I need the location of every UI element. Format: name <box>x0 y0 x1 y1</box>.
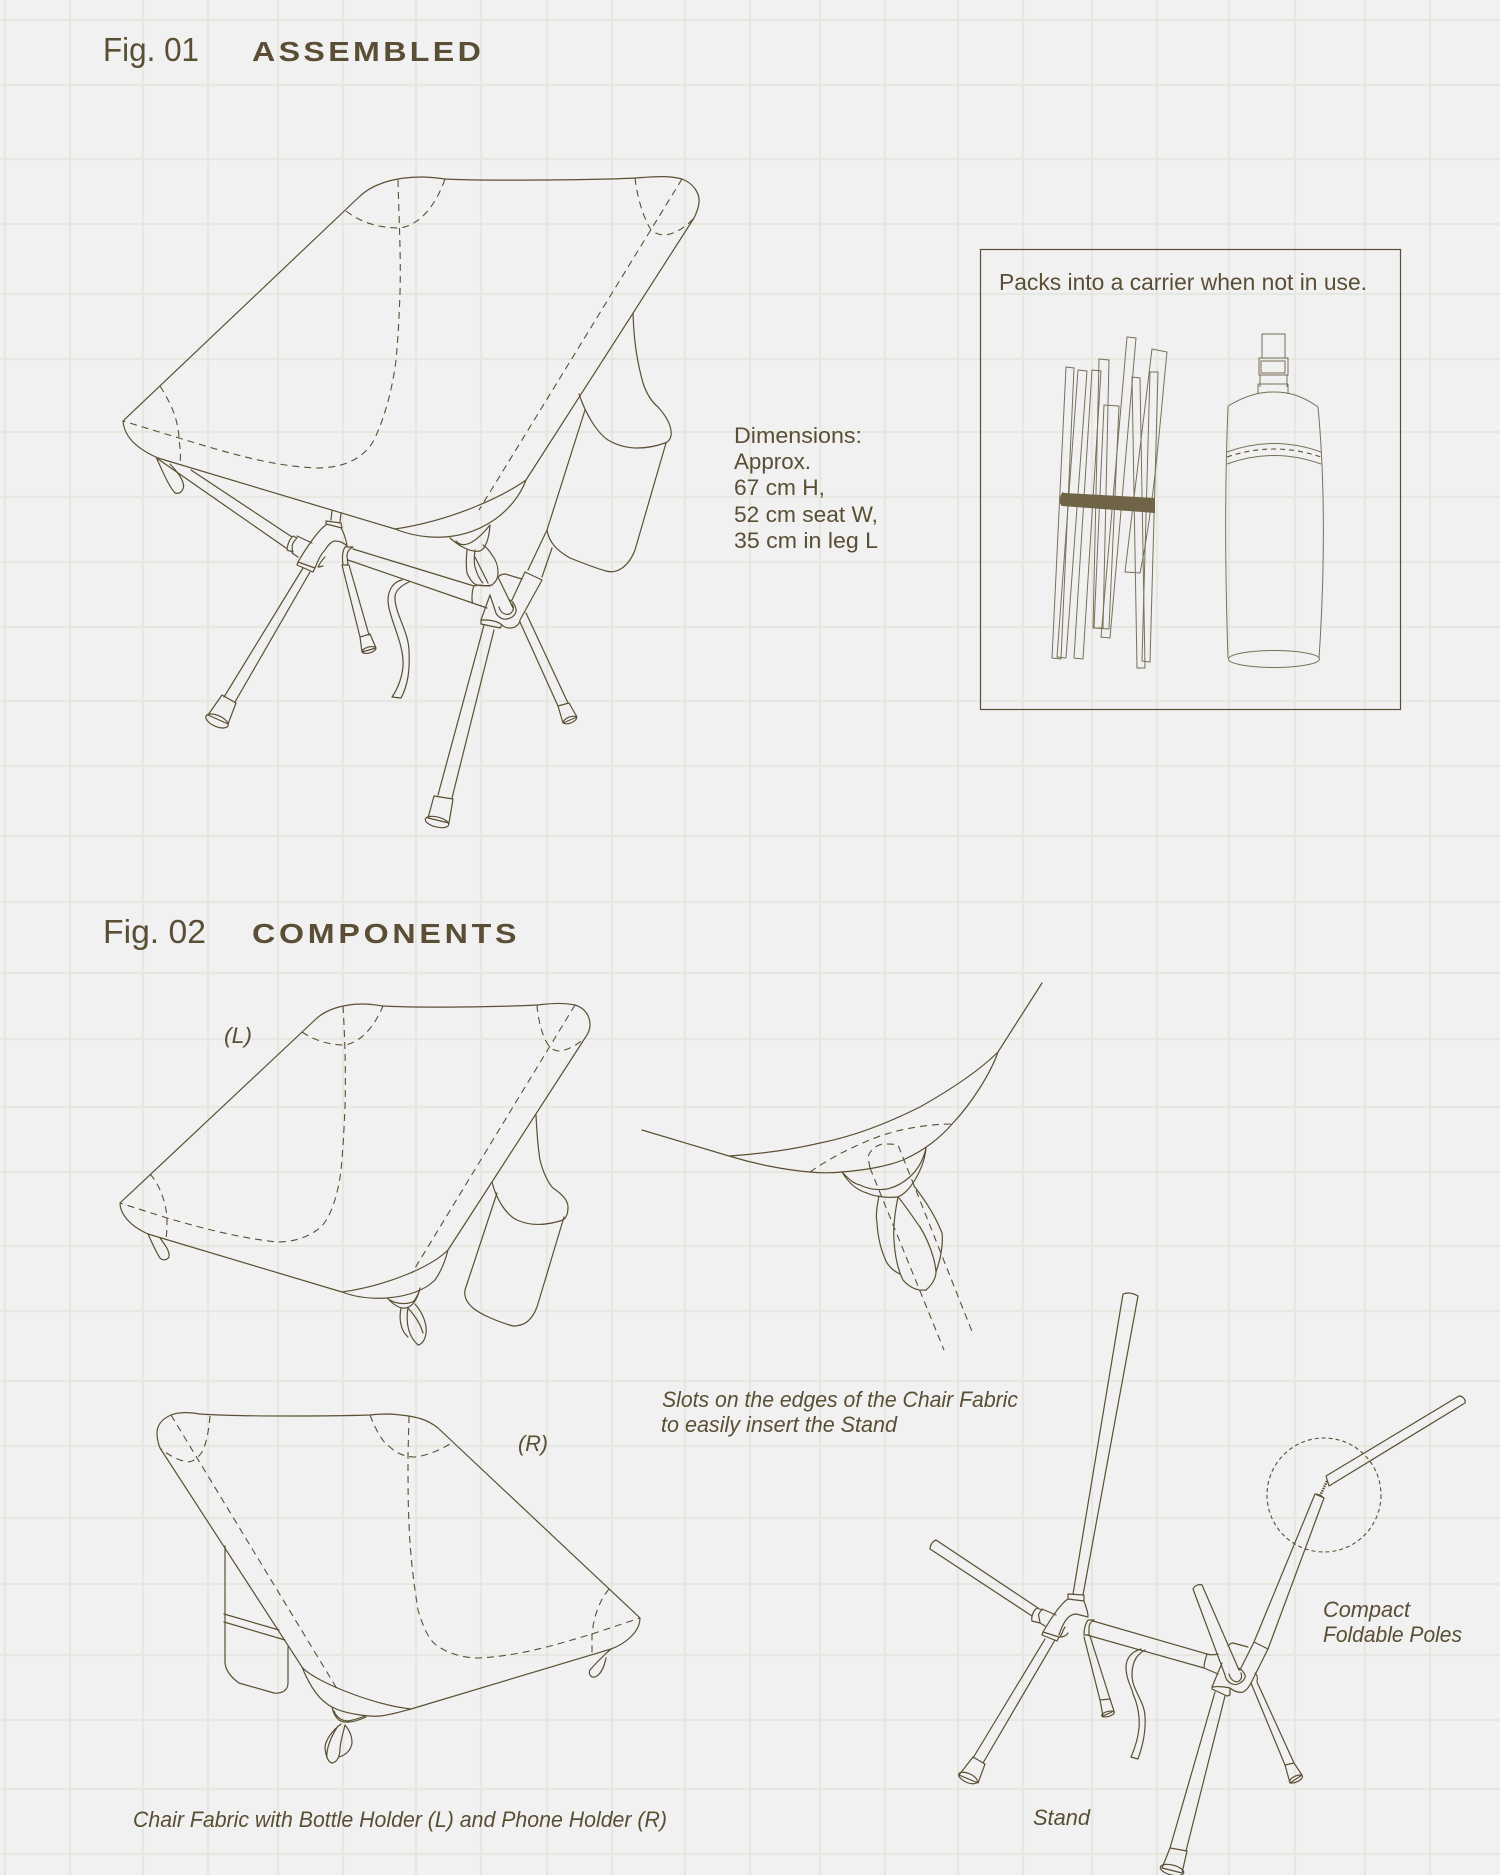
right front leg and foot <box>428 625 494 823</box>
dimensions text: 35 cm in leg L <box>734 528 878 553</box>
corner slot and loop <box>325 1707 366 1763</box>
section title: components: COMPONENTS <box>252 919 516 949</box>
caption: slots: Slots on the edges of the Chair Fabric <box>662 1387 1018 1412</box>
hidden sleeves <box>810 1124 973 1350</box>
icon: folded poles bundle <box>1052 337 1167 668</box>
section title: assembled: ASSEMBLED <box>252 37 481 67</box>
left hub <box>1042 1594 1094 1641</box>
hidden sleeves <box>160 1415 640 1692</box>
slot straps <box>842 1148 926 1197</box>
stand frame <box>158 459 578 830</box>
left front leg and foot <box>208 568 310 724</box>
foldable upright pole <box>1254 1494 1324 1649</box>
caption: chair fabric: Chair Fabric with Bottle Holder (L) and Phone Holder (R) <box>133 1807 667 1832</box>
right back leg and foot <box>1251 1682 1302 1783</box>
dimensions text: Approx. <box>734 449 811 474</box>
panel caption: Packs into a carrier when not in use. <box>999 269 1367 295</box>
fabric edge curves <box>642 983 1042 1173</box>
horizontal connecting tube <box>348 549 490 608</box>
right back leg and foot <box>520 613 577 723</box>
panel: packed carrier <box>980 250 1400 710</box>
left back leg and foot <box>342 565 376 652</box>
figure number 01: Fig. 01 <box>103 31 199 68</box>
chair fabric outline <box>123 177 699 537</box>
corner strap loop <box>156 457 184 493</box>
heading: Fig. 01 Assembled <box>103 31 481 68</box>
dimensions text: 52 cm seat W, <box>734 502 878 527</box>
folded upper pole <box>1326 1396 1465 1486</box>
dimensions text: Dimensions: <box>734 423 862 448</box>
dangling strap <box>1126 1649 1145 1759</box>
right front leg and foot <box>1162 1692 1225 1873</box>
short pole and ring <box>490 577 516 619</box>
caption: compact foldable poles: Foldable Poles <box>1323 1622 1462 1647</box>
illustration: assembled chair <box>123 177 699 830</box>
small corner loop <box>148 1234 169 1260</box>
caption: slots: to easily insert the Stand <box>661 1412 898 1437</box>
long rear pole <box>1073 1293 1138 1595</box>
dashed detail circle <box>1267 1438 1381 1552</box>
fabric outline <box>157 1413 640 1716</box>
hidden pole sleeves (dashed) <box>123 178 694 510</box>
right hub joint <box>481 572 542 628</box>
illustration: fabric right side <box>157 1413 640 1763</box>
corner slot and loop <box>387 1288 426 1345</box>
caption: compact foldable poles: Compact <box>1323 1597 1411 1622</box>
dimensions text <box>734 423 878 553</box>
left back leg and foot <box>1084 1636 1114 1716</box>
left arm pole <box>930 1540 1056 1626</box>
caption: stand: Stand <box>1033 1805 1091 1830</box>
elastic band <box>1060 492 1155 513</box>
connecting tube <box>1087 1621 1218 1674</box>
loop <box>876 1186 942 1290</box>
phone holder <box>224 1546 288 1693</box>
left front leg and foot <box>959 1639 1055 1783</box>
left hub joint <box>297 510 353 572</box>
elastic cord <box>1320 1481 1327 1496</box>
rear upright pole <box>528 410 585 577</box>
icon: carrier bag <box>1226 334 1323 668</box>
figure number 02: Fig. 02 <box>103 913 206 950</box>
hidden sleeves <box>120 1005 585 1273</box>
fabric outline <box>120 1003 590 1298</box>
illustration: stand <box>930 1293 1465 1875</box>
dimensions text: 67 cm H, <box>734 475 825 500</box>
bottle holder <box>465 1115 568 1326</box>
dangling strap <box>388 580 409 698</box>
panel border <box>980 250 1400 710</box>
bottle holder pocket <box>547 313 671 572</box>
short pole with ring <box>1193 1585 1245 1685</box>
caption: compact foldable poles <box>1323 1597 1462 1647</box>
slot and loop at seat corner <box>450 525 498 586</box>
label R: (R) <box>518 1431 548 1456</box>
illustration: fabric left side <box>120 1003 590 1345</box>
illustration: slot detail <box>642 983 1042 1350</box>
caption: slots <box>661 1387 1018 1437</box>
small corner loop <box>589 1649 611 1677</box>
left rear pole <box>158 459 312 557</box>
heading: Fig. 02 Components <box>103 913 516 950</box>
right hub <box>1212 1642 1268 1696</box>
label L: (L) <box>224 1023 252 1048</box>
